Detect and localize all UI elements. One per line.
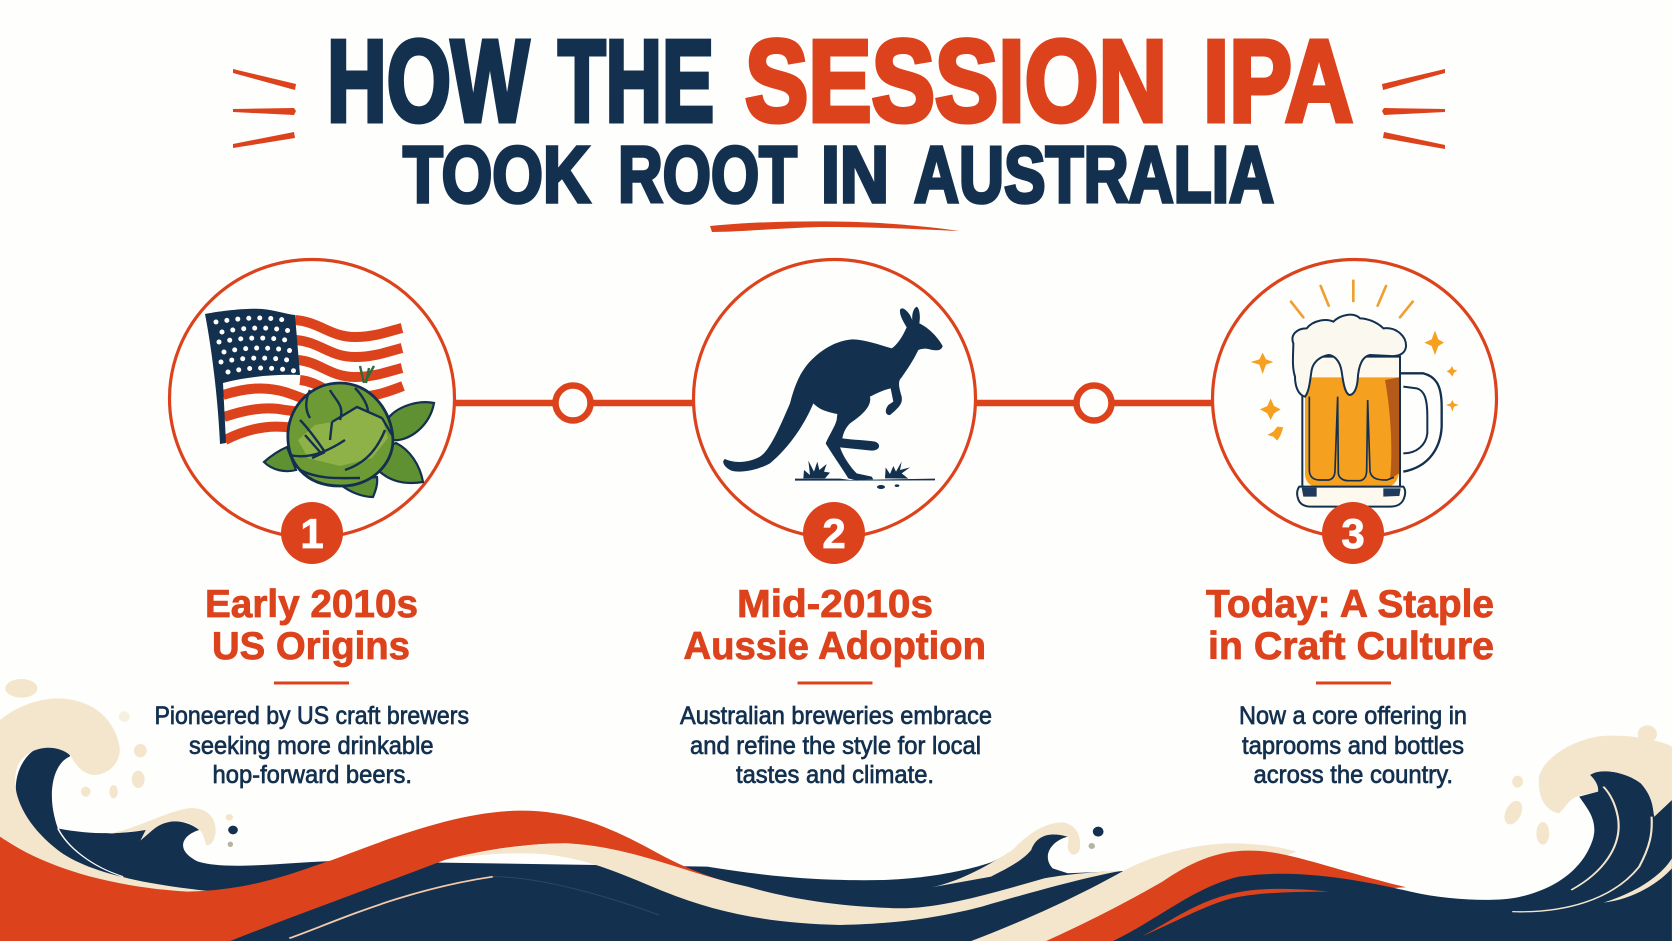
panel: step 1 US origins bbox=[170, 260, 454, 564]
step 3 divider bbox=[1316, 682, 1391, 684]
step 2 heading: Mid-2010s bbox=[737, 583, 933, 626]
heading line 2: ROOT bbox=[618, 130, 797, 219]
icon: american flag bbox=[205, 309, 403, 444]
step 2 divider bbox=[798, 682, 872, 684]
step 3 heading bbox=[1206, 583, 1494, 668]
heading line 2: IN bbox=[821, 130, 889, 219]
burst lines left bbox=[233, 69, 296, 148]
step 2 heading bbox=[684, 583, 986, 668]
step 2 description: tastes and climate. bbox=[736, 761, 934, 789]
text block: step 2 bbox=[680, 583, 992, 789]
step 3 heading: Today: A Staple bbox=[1206, 583, 1494, 626]
step 2 description: Australian breweries embrace bbox=[680, 702, 992, 730]
heading line 1: HOW bbox=[327, 16, 529, 146]
text block: step 3 bbox=[1206, 583, 1494, 789]
heading line 1: SESSION bbox=[745, 16, 1167, 146]
panel: step 3 craft culture bbox=[1212, 260, 1496, 564]
badge 1: 1 bbox=[300, 510, 324, 557]
bottom waves bbox=[0, 679, 1672, 941]
step 1 heading bbox=[205, 583, 418, 668]
step 3 heading: in Craft Culture bbox=[1208, 625, 1494, 668]
step 3 description: across the country. bbox=[1254, 761, 1453, 789]
badge 2 bbox=[803, 502, 865, 564]
step 1 heading: US Origins bbox=[212, 625, 410, 668]
heading line 2: TOOK bbox=[403, 130, 590, 219]
icon: beer mug with foam bbox=[1251, 281, 1459, 507]
title bbox=[327, 16, 1353, 219]
timeline connector 1 bbox=[455, 386, 693, 420]
circle frame 2 bbox=[694, 260, 976, 538]
heading line 1: THE bbox=[558, 16, 714, 146]
icon: green hop cone bbox=[264, 366, 434, 497]
step 3 description: Now a core offering in bbox=[1239, 702, 1467, 730]
icon: kangaroo silhouette bbox=[723, 307, 943, 489]
circle frame 1 bbox=[170, 260, 454, 538]
heading line 2: AUSTRALIA bbox=[914, 130, 1274, 219]
circle frame 3 bbox=[1212, 260, 1496, 538]
title underline brush stroke bbox=[710, 221, 959, 232]
badge 1 bbox=[281, 502, 343, 564]
step 3 description: taprooms and bottles bbox=[1242, 732, 1464, 760]
badge 3: 3 bbox=[1341, 510, 1365, 557]
heading line 1 bbox=[327, 16, 1353, 146]
timeline connector 2 bbox=[976, 386, 1212, 420]
step 2 description: and refine the style for local bbox=[690, 732, 981, 760]
step 3 description bbox=[1239, 702, 1467, 789]
step 1 description: Pioneered by US craft brewers bbox=[154, 702, 469, 730]
step 1 description: hop-forward beers. bbox=[212, 761, 412, 789]
step 2 description bbox=[680, 702, 992, 789]
badge 3 bbox=[1322, 502, 1384, 564]
step 2 heading: Aussie Adoption bbox=[684, 625, 986, 668]
step 1 heading: Early 2010s bbox=[205, 583, 418, 626]
panel: step 2 Aussie adoption bbox=[694, 260, 976, 564]
step 1 description bbox=[154, 702, 469, 789]
step 1 divider bbox=[274, 682, 349, 684]
heading line 1: IPA bbox=[1203, 16, 1353, 146]
text block: step 1 bbox=[154, 583, 469, 789]
burst lines right bbox=[1382, 69, 1445, 149]
badge 2: 2 bbox=[822, 510, 846, 557]
heading line 2 bbox=[403, 130, 1274, 219]
step 1 description: seeking more drinkable bbox=[189, 732, 434, 760]
